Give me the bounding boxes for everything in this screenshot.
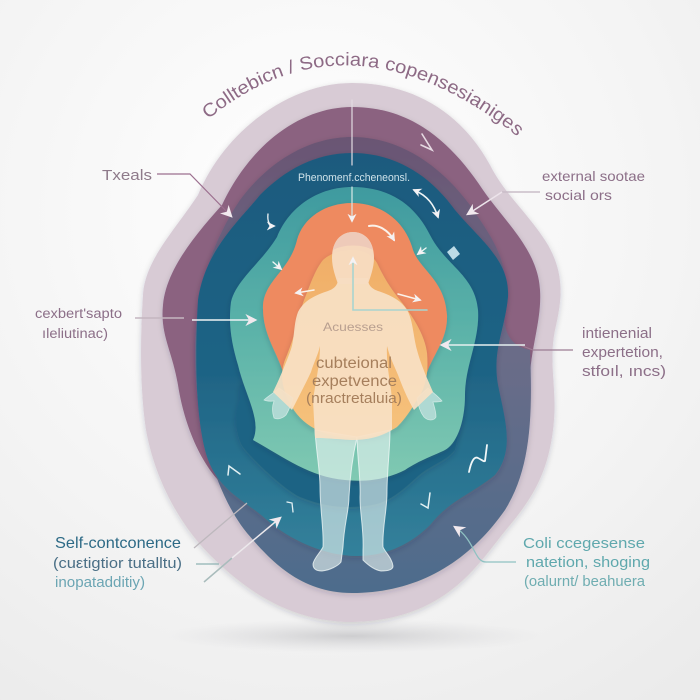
callout: middle right: expertetion, xyxy=(582,345,663,361)
callout: top left xyxy=(102,167,231,216)
callout: middle right: intienenial xyxy=(582,326,652,342)
callout: bottom right xyxy=(455,527,650,590)
layer: slate xyxy=(195,137,531,593)
center labels: cubteional xyxy=(316,355,392,372)
callout: bottom right: Coli ccegesense xyxy=(523,536,645,552)
center labels xyxy=(306,320,402,407)
center labels: Acuesses xyxy=(323,320,383,334)
layer: teal xyxy=(230,187,478,481)
callout: bottom left: inopatadditiy) xyxy=(55,574,145,591)
figure hands xyxy=(264,388,442,420)
arrow: small curve upper left xyxy=(268,214,274,226)
callout: top right xyxy=(468,168,645,214)
layer: inner dark band xyxy=(236,385,463,507)
inner arrows xyxy=(228,100,487,512)
callout: bottom left: Self-contconence xyxy=(55,535,181,552)
callout: middle left xyxy=(35,306,255,341)
concentric layers xyxy=(141,83,561,622)
figure torso and arms xyxy=(273,278,433,440)
arrow: double curve blue xyxy=(414,190,438,217)
arrow: central axes xyxy=(353,258,427,310)
callout: bottom left xyxy=(53,503,280,591)
arrow: orange right xyxy=(398,294,420,300)
layer: outer lilac xyxy=(141,83,561,622)
callout: middle left: cexbert'sapto xyxy=(35,306,122,321)
arrow: small teal left xyxy=(273,262,281,269)
layer: deep blue xyxy=(196,153,508,556)
mark: bottom tick left xyxy=(228,466,240,475)
figure hair cap xyxy=(333,232,373,250)
callout: bottom left: (cuεtigtior tutalltu) xyxy=(53,555,182,572)
label inside blue layer: Phenomenf.ccheneonsl. xyxy=(298,172,410,184)
human figure xyxy=(264,232,442,571)
mark: bottom tick mid xyxy=(287,502,293,512)
layer: orange xyxy=(263,203,447,378)
arrow: orange left xyxy=(296,290,314,293)
callout: top left: Txeals xyxy=(102,167,152,184)
layer: mauve xyxy=(163,107,540,565)
callout: bottom right: natetion, shoging xyxy=(526,555,650,571)
figure legs xyxy=(313,430,393,571)
callout: top right: social ors xyxy=(545,187,612,203)
mark: zigzag xyxy=(469,445,487,472)
arrow: chevron top right xyxy=(421,134,432,150)
center labels: expetvence xyxy=(312,373,397,390)
arrow: small teal right xyxy=(418,248,426,254)
callout: bottom right: (oalurnt/ beahuera xyxy=(524,574,646,590)
icon: small chip xyxy=(447,246,460,260)
title curved: Colltebicn / Socciara copensesianiges xyxy=(203,52,522,136)
figure head xyxy=(332,232,374,284)
mark: check xyxy=(421,493,430,508)
layer: amber xyxy=(282,250,428,438)
floor shadow xyxy=(162,619,542,653)
arrow: orange curve xyxy=(369,226,394,240)
callout: middle left: ıleliutinac) xyxy=(42,326,108,341)
callout: top right: external sootae xyxy=(542,168,645,184)
arrow: central drop xyxy=(351,187,353,221)
arrow: central top line xyxy=(351,100,353,165)
callout: middle right xyxy=(442,326,666,380)
callout: middle right: stfoıl, ıncs) xyxy=(582,364,666,380)
center labels: (nractretaluia) xyxy=(306,390,402,407)
